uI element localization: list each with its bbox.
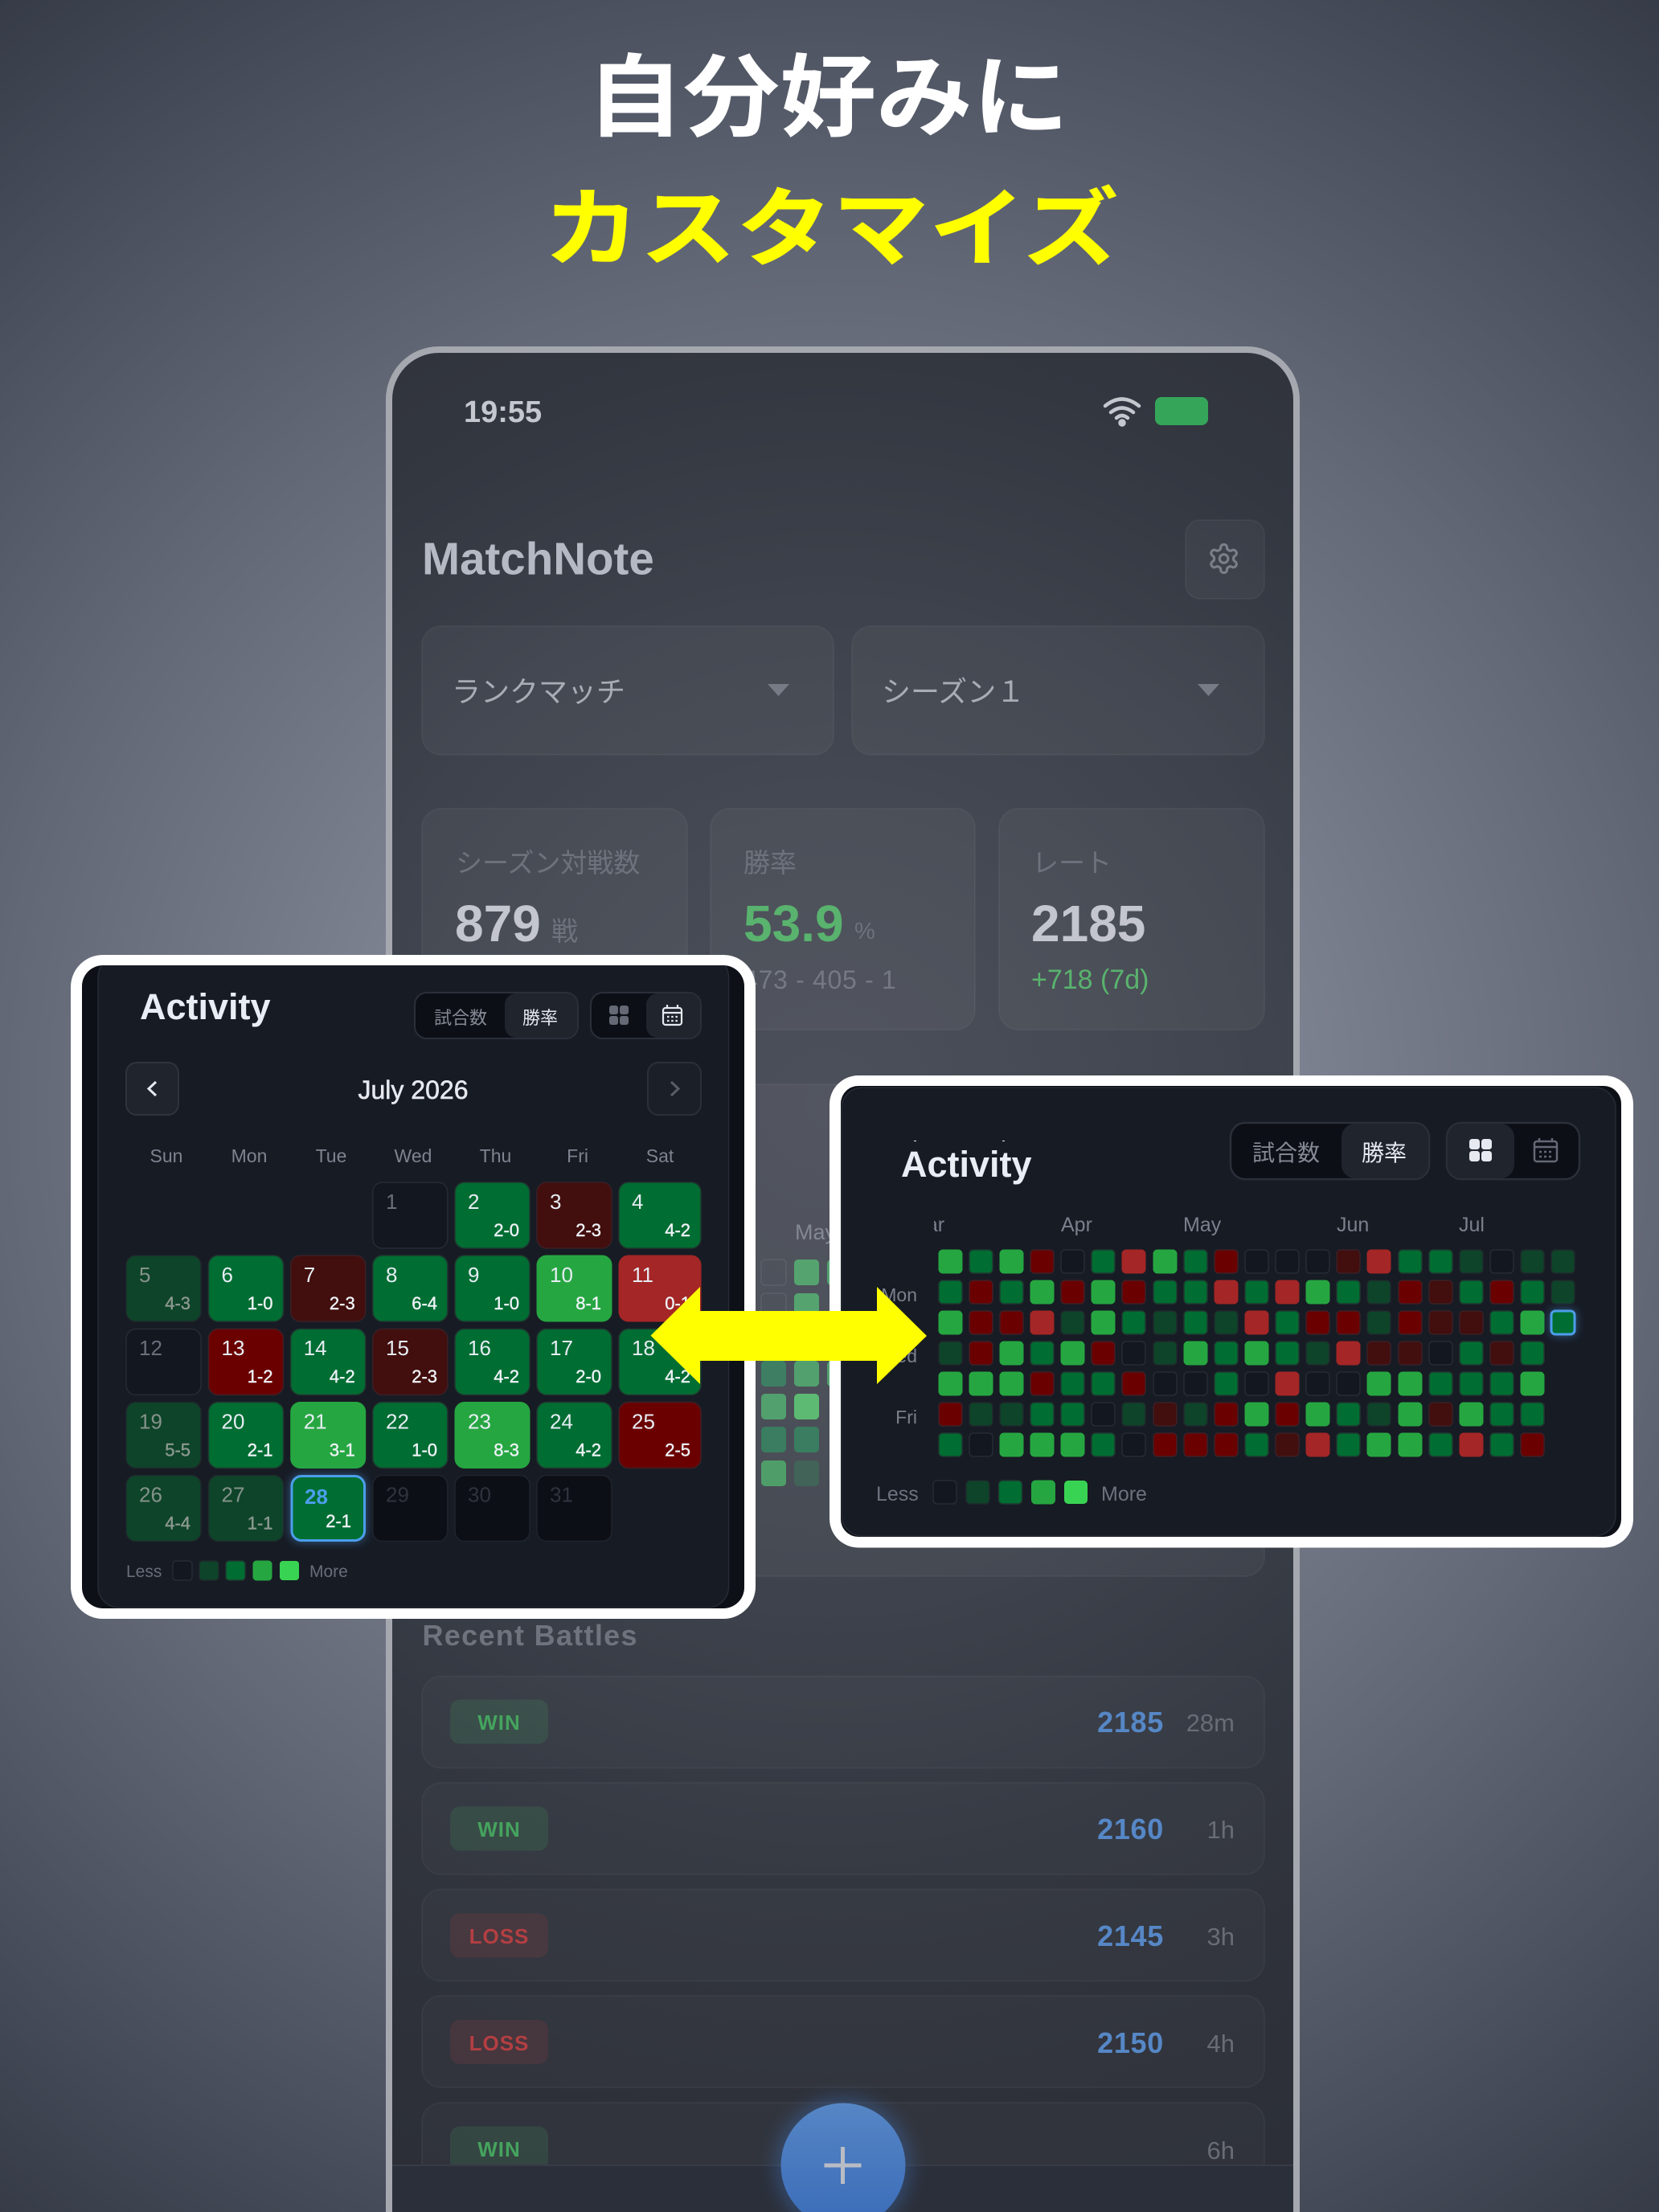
stat card: win rate: % <box>854 919 875 944</box>
weekday labels: Sun <box>150 1145 182 1166</box>
recent battles heading: Recent Battles <box>423 1619 638 1652</box>
battle row 2: 2160 <box>1097 1813 1164 1845</box>
battle row 4: 2150 <box>1097 2026 1164 2059</box>
card frame <box>830 1075 1633 1548</box>
week 4: 21 <box>304 1410 327 1434</box>
battle row 5 <box>422 2103 1264 2165</box>
week 3: 2-3 <box>412 1366 437 1387</box>
week 5: 28 <box>305 1485 328 1509</box>
weekday labels: Sat <box>646 1145 674 1166</box>
week 5 <box>126 1476 612 1542</box>
legend: Less <box>876 1483 919 1505</box>
stat card: season battles: シーズン対戦数 <box>456 848 640 878</box>
button: previous month <box>126 1063 178 1115</box>
week 2: 7 <box>304 1263 315 1287</box>
week 2: 9 <box>468 1263 479 1287</box>
bottom navigation bar <box>392 2165 1293 2212</box>
stat card: win rate: 473 - 405 - 1 <box>743 965 897 994</box>
week 5: 31 <box>550 1482 573 1506</box>
week 4 <box>126 1402 701 1468</box>
week 4: 20 <box>222 1410 244 1434</box>
week 2: 8 <box>386 1263 397 1287</box>
week 4: 8-3 <box>494 1440 519 1460</box>
battle row 4: LOSS <box>469 2031 529 2055</box>
week 5: 27 <box>222 1482 244 1506</box>
heatmap grid <box>939 1250 1575 1456</box>
phone frame <box>389 350 1296 2212</box>
stat card: rating: レート <box>1032 848 1112 878</box>
week 5: 29 <box>386 1482 409 1506</box>
weekday labels: Wed <box>395 1145 432 1166</box>
month labels: Mar <box>910 1214 944 1236</box>
card: calendar view <box>71 955 756 1619</box>
legend <box>126 1561 348 1581</box>
battle row 3: 3h <box>1207 1923 1235 1951</box>
battle row 1: WIN <box>477 1710 521 1735</box>
calendar grid <box>126 1182 701 1542</box>
battle row 3 <box>422 1889 1264 1981</box>
weekday labels <box>879 1284 917 1428</box>
button: next month <box>648 1063 701 1115</box>
week 2: 1-0 <box>494 1293 519 1313</box>
toggle: view <box>1447 1123 1579 1179</box>
week 5: 30 <box>468 1482 491 1506</box>
weekday labels <box>150 1145 674 1166</box>
week 3: 14 <box>304 1336 327 1360</box>
stat card: rating: 2185 <box>1031 895 1145 952</box>
today highlighted cell <box>1550 1310 1575 1335</box>
month label: July 2026 <box>358 1075 468 1104</box>
icon: gear <box>1211 545 1236 572</box>
battle row 2 <box>422 1783 1264 1874</box>
week 2: 11 <box>632 1263 653 1287</box>
week 4: 22 <box>386 1410 409 1434</box>
month labels: Jul <box>1459 1214 1485 1236</box>
week 1: 2-3 <box>576 1220 601 1240</box>
activity panel behind cards <box>422 1084 1264 1576</box>
week 2: 0-1 <box>665 1293 690 1313</box>
week 3: 12 <box>139 1336 162 1360</box>
week 4: 1-0 <box>412 1440 437 1460</box>
title line 1: 自分好みに <box>587 26 1069 155</box>
week 1: 2 <box>468 1190 479 1214</box>
week 4: 24 <box>550 1410 573 1434</box>
week 2: 2-3 <box>330 1293 355 1313</box>
card: heatmap view <box>830 1075 1633 1548</box>
week 4: 4-2 <box>576 1440 601 1460</box>
dropdown: season <box>852 626 1264 755</box>
recent battles list <box>422 1677 1264 2194</box>
week 2: 4-3 <box>165 1293 190 1313</box>
double-headed arrow <box>651 1287 927 1384</box>
legend: Less <box>126 1563 162 1581</box>
week 2: 10 <box>550 1263 573 1287</box>
dropdown: match type <box>422 626 834 755</box>
week 3: 4-2 <box>494 1366 519 1387</box>
week 4: 19 <box>139 1410 162 1434</box>
stat card: season battles: 879 <box>455 895 541 952</box>
legend: More <box>309 1563 348 1581</box>
week 2: 6-4 <box>412 1293 437 1313</box>
week 3: 2-0 <box>576 1366 601 1387</box>
app name: MatchNote <box>422 534 654 584</box>
week 5: 2-1 <box>326 1511 351 1531</box>
week 3: 4-2 <box>330 1366 355 1387</box>
week 4: 2-1 <box>248 1440 273 1460</box>
settings button <box>1186 520 1264 599</box>
toggle: metric <box>1231 1123 1429 1179</box>
heading: Activity <box>140 986 271 1027</box>
icon: calendar <box>1534 1138 1557 1161</box>
week 2: 1-0 <box>248 1293 273 1313</box>
stat card: win rate: 勝率 <box>743 848 797 878</box>
week 3: 15 <box>386 1336 409 1360</box>
weekday labels: Mon <box>881 1284 917 1305</box>
week 2 <box>126 1256 701 1321</box>
title line 2: カスタマイズ <box>543 159 1119 284</box>
battle row 1: 2185 <box>1097 1706 1164 1739</box>
week 1 <box>373 1182 701 1248</box>
month labels: Jun <box>1337 1214 1369 1236</box>
icon: wifi <box>1105 399 1139 424</box>
toggle: metric: 勝率 <box>1362 1141 1407 1165</box>
battle row 4 <box>422 1996 1264 2087</box>
week 1: 3 <box>550 1190 561 1214</box>
week 1: 2-0 <box>494 1220 519 1240</box>
week 1: 4 <box>632 1190 643 1214</box>
week 1: 1 <box>386 1190 397 1214</box>
icon: grid <box>1469 1139 1492 1161</box>
battle row 1 <box>422 1677 1264 1768</box>
week 4: 25 <box>632 1410 655 1434</box>
weekday labels: Wed <box>879 1346 917 1366</box>
stat card: rating <box>999 809 1264 1030</box>
toggle: view <box>591 993 701 1038</box>
activity panel behind cards: May <box>795 1220 837 1244</box>
month labels <box>934 1217 1484 1235</box>
week 2: 8-1 <box>576 1293 601 1313</box>
week 4: 5-5 <box>165 1440 190 1460</box>
legend <box>876 1481 1147 1505</box>
icon: battery <box>1155 397 1208 425</box>
title <box>543 26 1119 284</box>
week 4: 3-1 <box>330 1440 355 1460</box>
week 4: 2-5 <box>665 1440 690 1460</box>
dropdown: season: シーズン１ <box>882 675 1025 708</box>
week 3: 16 <box>468 1336 491 1360</box>
week 3: 17 <box>550 1336 573 1360</box>
battle row 5: WIN <box>477 2137 521 2161</box>
icon: grid <box>609 1006 629 1025</box>
icon: calendar <box>663 1005 682 1025</box>
stat card: win rate <box>711 809 975 1030</box>
week 3: 1-2 <box>248 1366 273 1387</box>
icon: plus <box>825 2147 862 2184</box>
battle row 3: 2145 <box>1097 1919 1164 1952</box>
week 3: 4-2 <box>665 1366 690 1387</box>
toggle: metric <box>415 993 578 1038</box>
card frame <box>71 955 756 1619</box>
week 1: 4-2 <box>665 1220 690 1240</box>
legend: More <box>1101 1483 1147 1505</box>
phone mockup <box>389 350 1296 2212</box>
month labels: Apr <box>1061 1214 1092 1236</box>
stat card: win rate: 53.9 <box>743 895 844 952</box>
battle row 2: WIN <box>477 1817 521 1841</box>
weekday labels: Tue <box>316 1145 346 1166</box>
status bar time: 19:55 <box>464 395 542 429</box>
add button <box>776 2098 911 2212</box>
weekday labels: Mon <box>231 1145 267 1166</box>
weekday labels: Fri <box>895 1407 917 1428</box>
battle row 4: 4h <box>1207 2030 1235 2058</box>
week 2: 5 <box>139 1263 150 1287</box>
weekday labels: Thu <box>480 1145 511 1166</box>
stat card: rating: +718 (7d) <box>1031 965 1149 995</box>
week 5: 4-4 <box>165 1513 190 1534</box>
battle row 1: 28m <box>1186 1709 1235 1737</box>
battle row 2: 1h <box>1207 1816 1235 1844</box>
stat card: season battles <box>422 809 687 1030</box>
week 5: 1-1 <box>248 1513 273 1534</box>
faded heatmap squares <box>761 1260 852 1486</box>
month labels: May <box>1183 1214 1222 1236</box>
heading: Activity <box>901 1144 1032 1185</box>
week 3: 18 <box>632 1336 655 1360</box>
stat card: season battles: 戦 <box>551 916 578 946</box>
dropdown: match type: ランクマッチ <box>452 675 625 708</box>
week 2: 6 <box>222 1263 233 1287</box>
toggle: metric: 試合数 <box>434 1008 487 1028</box>
week 3 <box>126 1329 701 1395</box>
battle row 3: LOSS <box>469 1924 529 1948</box>
weekday labels: Fri <box>567 1145 588 1166</box>
battle row 5: 6h <box>1207 2136 1235 2165</box>
week 4: 23 <box>468 1410 491 1434</box>
week 5: 26 <box>139 1482 162 1506</box>
week 3: 13 <box>222 1336 244 1360</box>
toggle: metric: 試合数 <box>1252 1141 1320 1165</box>
toggle: metric: 勝率 <box>522 1008 558 1028</box>
